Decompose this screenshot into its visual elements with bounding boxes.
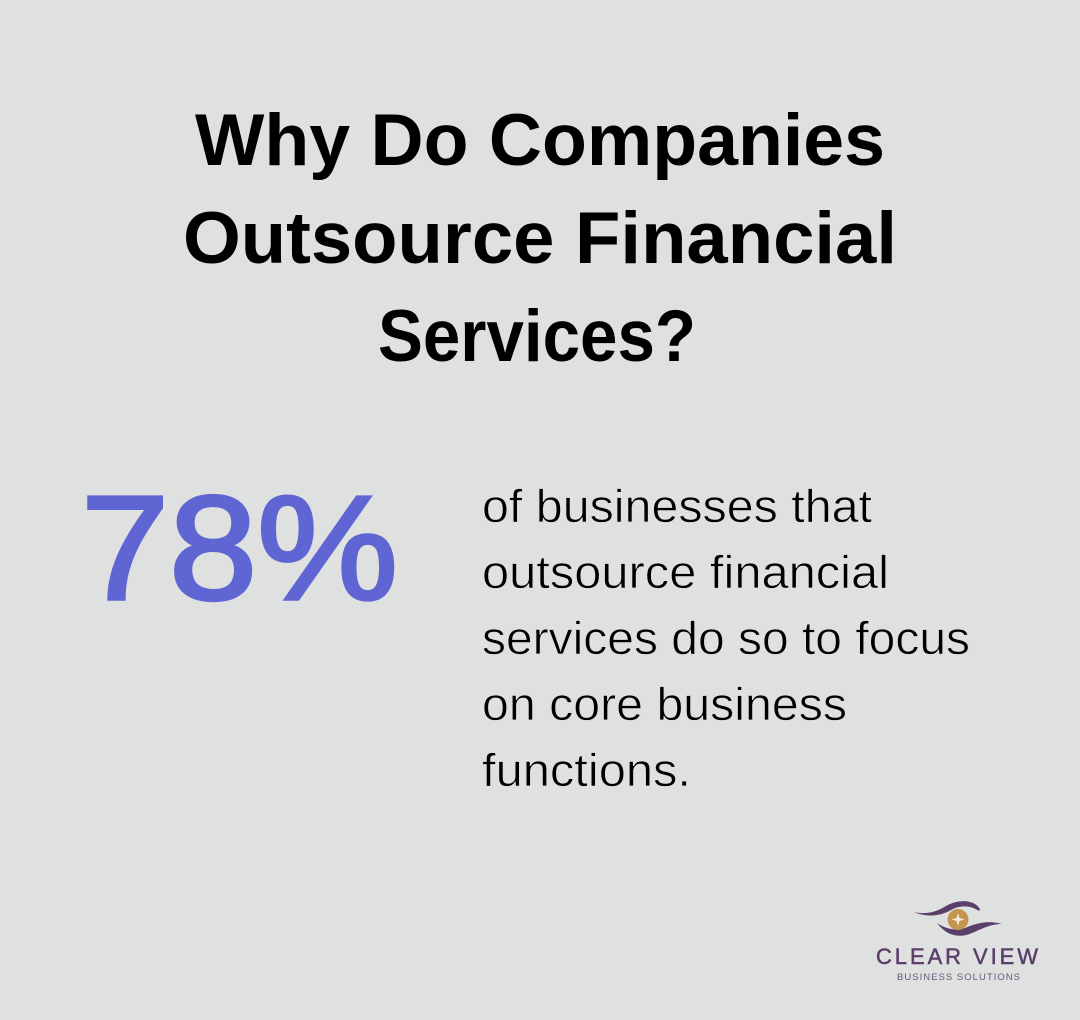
logo tagline: BUSINESS SOLUTIONS (897, 972, 1020, 983)
logo wordmark: CLEAR VIEW (876, 944, 1038, 969)
statistic description (482, 480, 970, 796)
title: Services? (378, 296, 696, 377)
statistic description: on core business (482, 678, 847, 730)
title: Why Do Companies (195, 100, 885, 181)
title (183, 100, 897, 377)
logo: Clear View Business Solutions (876, 901, 1038, 983)
statistic description: functions. (482, 744, 691, 796)
statistic description: outsource financial (482, 546, 889, 598)
big statistic: 78%: 78% (81, 466, 398, 631)
icon: eye (914, 901, 1002, 936)
statistic description: of businesses that (482, 480, 872, 532)
title: Outsource Financial (183, 198, 897, 279)
statistic description: services do so to focus (482, 612, 970, 664)
